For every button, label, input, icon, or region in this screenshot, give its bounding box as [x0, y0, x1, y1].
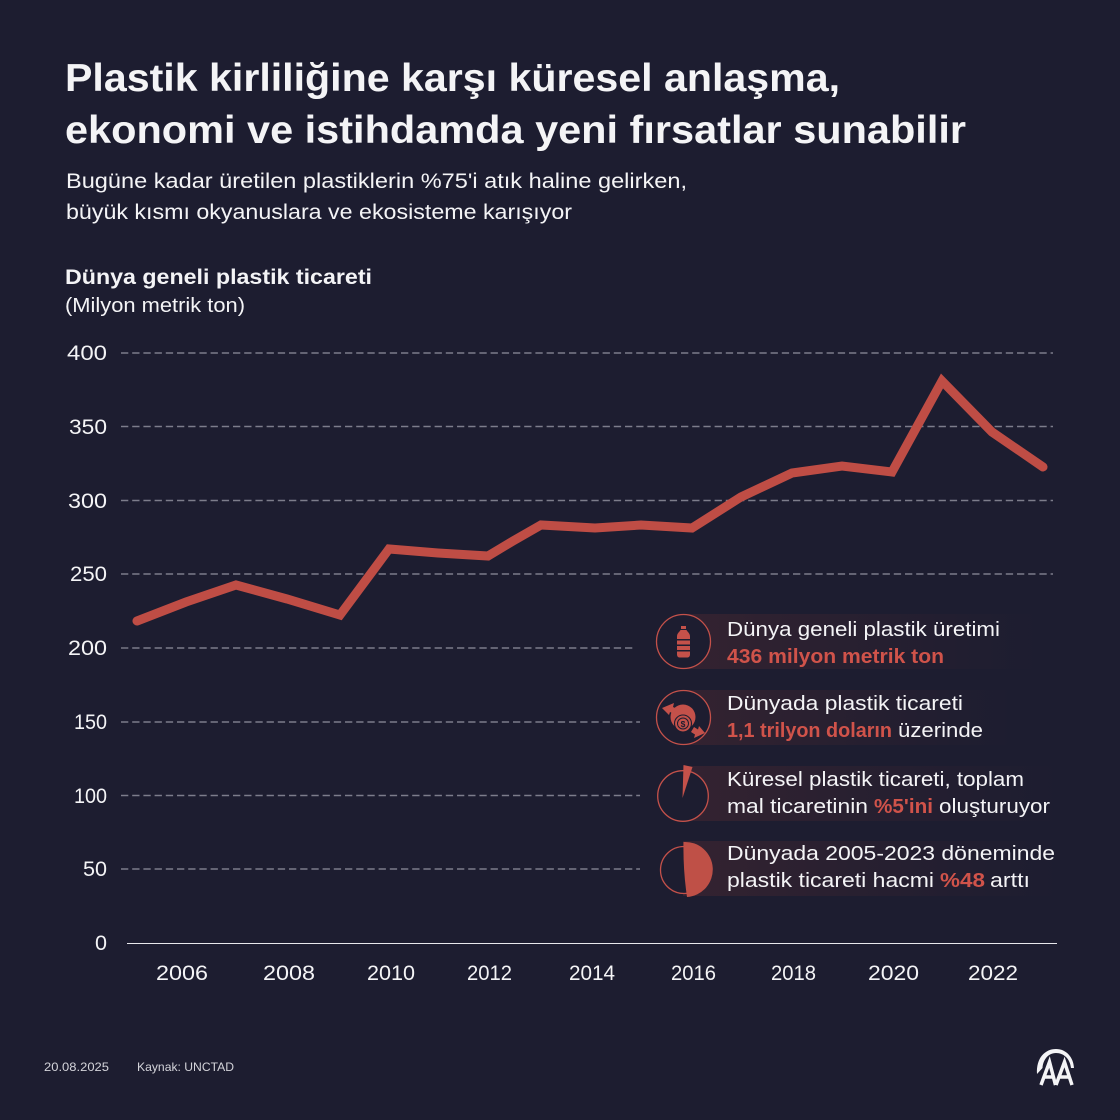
panel: volume growth: plastik ticareti hacmi	[727, 869, 934, 892]
x axis labels: 2006	[156, 961, 208, 985]
y axis labels: 350	[69, 415, 107, 439]
panel: trade value: üzerinde	[898, 719, 983, 742]
panel: share of goods trade: mal ticaretinin	[727, 795, 868, 818]
chart heading: Dünya geneli plastik ticareti	[65, 266, 372, 289]
panel: production: Dünya geneli plastik üretimi	[727, 618, 1000, 641]
y axis labels: 300	[68, 489, 107, 513]
y axis labels	[67, 341, 107, 955]
data line: plastic trade	[137, 381, 1043, 621]
subtitle	[66, 170, 687, 224]
line chart	[67, 341, 1057, 985]
subtitle: büyük kısmı okyanuslara ve ekosisteme karışıyor	[66, 201, 572, 224]
y axis labels: 150	[74, 710, 107, 734]
panel: volume growth: arttı	[990, 869, 1030, 892]
panel: volume growth	[660, 841, 1058, 897]
panel: production: 436 milyon metrik ton	[727, 645, 944, 668]
chart heading	[65, 266, 372, 317]
y axis labels: 200	[68, 636, 107, 660]
date: 20.08.2025	[44, 1060, 109, 1074]
panel: share of goods trade	[658, 765, 1058, 821]
panel: share of goods trade: %5'ini	[874, 795, 933, 818]
x axis labels: 2022	[968, 961, 1018, 985]
panel: trade value: 1,1 trilyon doların	[727, 719, 892, 742]
icon: 5 percent pie	[658, 765, 708, 821]
y axis labels: 400	[67, 341, 107, 365]
icon: coin with arrows	[656, 690, 710, 744]
icon: coin with arrows: $	[681, 719, 686, 729]
y axis labels: 250	[70, 562, 107, 586]
x axis labels: 2012	[467, 961, 512, 985]
y axis labels: 100	[74, 784, 107, 808]
x axis labels: 2010	[367, 961, 415, 985]
y axis labels: 0	[95, 931, 107, 955]
panel: production	[656, 614, 1038, 669]
x axis labels: 2014	[569, 961, 615, 985]
title	[65, 57, 966, 152]
logo: AA	[1037, 1049, 1074, 1085]
x axis labels	[156, 961, 1018, 985]
chart heading: (Milyon metrik ton)	[65, 295, 245, 317]
title: ekonomi ve istihdamda yeni fırsatlar sunabilir	[65, 109, 966, 152]
x axis labels: 2016	[671, 961, 716, 985]
y axis labels: 50	[83, 857, 107, 881]
panel: trade value: Dünyada plastik ticareti	[727, 692, 963, 715]
subtitle: Bugüne kadar üretilen plastiklerin %75'i atık haline gelirken,	[66, 170, 687, 193]
panel: trade value	[656, 690, 1013, 745]
source: Kaynak: UNCTAD	[137, 1060, 234, 1074]
icon: 48 percent pie	[660, 842, 713, 897]
x axis labels: 2008	[263, 961, 315, 985]
panel: share of goods trade: Küresel plastik ticareti, toplam	[727, 768, 1024, 791]
panel: volume growth: Dünyada 2005-2023 döneminde	[727, 842, 1055, 865]
panel: share of goods trade: oluşturuyor	[939, 795, 1050, 818]
x axis labels: 2018	[771, 961, 816, 985]
x axis labels: 2020	[868, 961, 919, 985]
icon: bottle	[656, 614, 710, 668]
title: Plastik kirliliğine karşı küresel anlaşma,	[65, 57, 840, 100]
panel: volume growth: %48	[940, 869, 985, 892]
